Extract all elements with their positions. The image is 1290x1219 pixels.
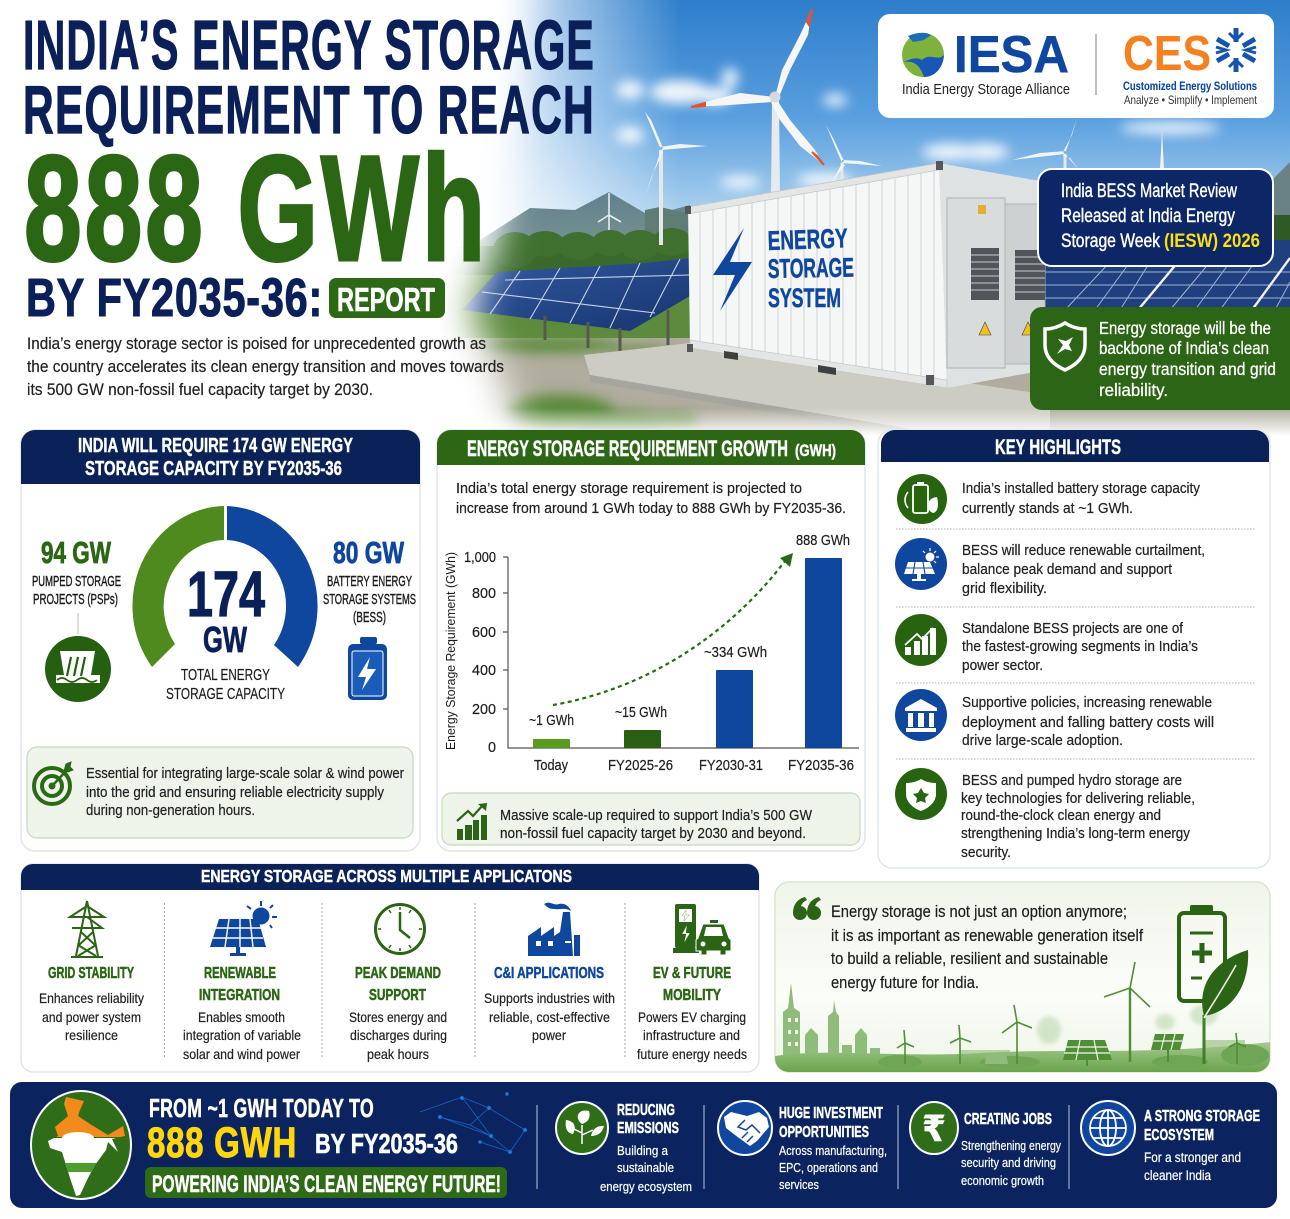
- bar value labels: ~1 GWh: [529, 713, 574, 729]
- bar value labels: ~15 GWh: [615, 705, 667, 721]
- bar chart: [443, 533, 859, 774]
- column: C&I applications: C&I APPLICATIONS: [494, 965, 604, 982]
- panel heading: INDIA WILL REQUIRE 174 GW ENERGY: [78, 435, 353, 457]
- benefit: ecosystem: For a stronger and: [1144, 1150, 1241, 1165]
- column: peak demand support: [349, 904, 447, 1062]
- container label: SYSTEM: [768, 283, 841, 313]
- panel heading: STORAGE CAPACITY BY FY2035-36: [85, 458, 342, 480]
- column: grid stability: GRID STABILITY: [48, 965, 134, 982]
- right solar array: [1045, 240, 1290, 312]
- container label: ENERGY: [767, 223, 848, 256]
- title: INDIA’S ENERGY STORAGE: [23, 6, 595, 84]
- icon: solar panel: [895, 538, 947, 590]
- gauge: total value: TOTAL ENERGY: [181, 667, 270, 684]
- icon: globe: [902, 33, 944, 77]
- icon: clock: [376, 904, 424, 954]
- note: integration: during non-generation hours.: [86, 803, 255, 819]
- column: peak demand support: PEAK DEMAND: [355, 965, 441, 982]
- y-axis tick labels: [464, 550, 496, 756]
- bars: [533, 558, 842, 748]
- panel: storage requirement growth: [437, 430, 865, 851]
- gauge: pumped storage arc: [132, 506, 224, 667]
- icon: battery: [348, 637, 387, 700]
- logo card: Customized Energy Solutions: [1123, 79, 1257, 93]
- category labels: FY2025-26: [608, 758, 673, 774]
- white fade over photo: [380, 0, 530, 470]
- column: C&I applications: reliable, cost-effective: [489, 1009, 610, 1025]
- callout: market review: [1038, 169, 1273, 266]
- logo card: [878, 14, 1274, 118]
- benefit: jobs: security and driving: [961, 1156, 1056, 1170]
- icon: rupee: ₹: [922, 1109, 946, 1150]
- battery storage stat: [323, 535, 416, 700]
- intro paragraph: the country accelerates its clean energy transition and moves towards: [27, 357, 504, 376]
- panel: 174 GW capacity: [21, 430, 420, 851]
- highlight 5: security.: [961, 845, 1011, 861]
- callout: backbone: reliability.: [1099, 380, 1168, 400]
- column: grid stability: resilience: [65, 1027, 118, 1043]
- column: renewable integration: [183, 901, 301, 1062]
- gauge: total value: STORAGE CAPACITY: [166, 686, 285, 703]
- icon: transmission tower: [70, 901, 104, 957]
- benefit: investment: HUGE INVESTMENT: [779, 1105, 883, 1122]
- callout: market review: Storage Week: [1061, 231, 1160, 252]
- intro paragraph: [27, 334, 504, 399]
- gauge: total value: [166, 558, 285, 703]
- benefit: jobs: CREATING JOBS: [964, 1111, 1052, 1128]
- highlight 2: grid flexibility.: [962, 581, 1047, 597]
- banner headline: 888 GWH: [147, 1119, 297, 1167]
- callout: market review: (IESW) 2026: [1164, 231, 1260, 252]
- panel heading: [881, 430, 1269, 462]
- description: increase from around 1 GWh today to 888 GWh by FY2035-36.: [456, 501, 846, 517]
- note: scale-up: Massive scale-up required to support India’s 500 GW: [500, 808, 812, 824]
- highlight 5: BESS and pumped hydro storage are: [962, 773, 1182, 789]
- category labels: Today: [534, 758, 569, 774]
- gauge: total value: 174: [187, 558, 265, 630]
- column: peak demand support: discharges during: [350, 1027, 447, 1043]
- icon: growth bars: [457, 803, 487, 840]
- icon: EV charger and car: [673, 904, 731, 955]
- benefit: reducing emissions: REDUCING: [617, 1102, 675, 1119]
- icon: India map: [31, 1090, 131, 1200]
- title: [23, 6, 595, 148]
- panel heading: KEY HIGHLIGHTS: [995, 436, 1121, 459]
- container label: STORAGE: [768, 253, 854, 284]
- highlight 3: power sector.: [962, 658, 1043, 674]
- subtitle: by FY2035-36: BY FY2035-36:: [26, 268, 323, 328]
- panel heading: [21, 430, 420, 484]
- pumped storage stat: PUMPED STORAGE: [32, 574, 121, 590]
- note: integration: into the grid and ensuring reliable electricity supply: [86, 785, 385, 801]
- pumped storage stat: [32, 535, 121, 702]
- benefit: ecosystem: ECOSYSTEM: [1144, 1127, 1214, 1144]
- note: integration: Essential for integrating large-scale solar & wind power: [86, 766, 404, 782]
- logo card: India Energy Storage Alliance: [902, 81, 1070, 98]
- panel: applications: [21, 864, 759, 1072]
- note: integration: [27, 747, 413, 838]
- column: renewable integration: INTEGRATION: [199, 987, 280, 1004]
- report badge: REPORT: [337, 281, 435, 318]
- column: peak demand support: SUPPORT: [369, 987, 426, 1004]
- benefit: investment: OPPORTUNITIES: [779, 1124, 869, 1141]
- icon: growth chart: [895, 614, 947, 666]
- icon: globe: [1081, 1101, 1135, 1155]
- icon: government building: [895, 689, 947, 741]
- highlight 3: the fastest-growing segments in India’s: [962, 639, 1198, 655]
- icon: quotation mark: [793, 897, 821, 920]
- highlight 4: Supportive policies, increasing renewable: [962, 695, 1212, 711]
- y-axis tick labels: 200: [472, 702, 496, 718]
- panel heading: [437, 430, 865, 465]
- highlight 3: [895, 614, 1198, 674]
- bottom banner: [10, 1082, 1277, 1208]
- note: scale-up: [442, 793, 860, 845]
- quote text: energy future for India.: [831, 974, 979, 992]
- battery storage stat: STORAGE SYSTEMS: [323, 592, 416, 608]
- callout: market review: India BESS Market Review: [1061, 181, 1237, 202]
- battery storage stat: 80 GW: [333, 535, 405, 570]
- quote text: [831, 903, 1143, 992]
- category labels: [534, 758, 854, 774]
- panel heading: ENERGY STORAGE REQUIREMENT GROWTH: [467, 436, 788, 461]
- column: grid stability: and power system: [42, 1009, 141, 1025]
- bar value labels: 888 GWh: [796, 533, 850, 549]
- icon: rupee: [910, 1102, 958, 1154]
- panel heading: (GWH): [795, 441, 836, 460]
- column: EV and future mobility: EV & FUTURE: [653, 965, 731, 982]
- highlight 4: [895, 689, 1214, 749]
- highlight 1: [897, 474, 1201, 524]
- y-axis title: Energy Storage Requirement (GWh): [443, 552, 458, 750]
- banner headline: FROM ~1 GWH TODAY TO: [149, 1093, 374, 1123]
- arrow: growth trend: [553, 553, 793, 705]
- battery storage container: [685, 161, 1045, 388]
- icon: target: [34, 762, 73, 804]
- benefit: ecosystem: [1081, 1101, 1260, 1183]
- title: REQUIREMENT TO REACH: [23, 72, 595, 148]
- icon: battery with leaf: [1179, 905, 1248, 1018]
- column: C&I applications: [484, 903, 615, 1043]
- column: grid stability: [39, 901, 144, 1043]
- quote text: it is as important as renewable generation itself: [831, 927, 1143, 945]
- report badge: [329, 278, 445, 318]
- bar value labels: [529, 533, 850, 729]
- highlight 3: Standalone BESS projects are one of: [962, 621, 1184, 637]
- column: renewable integration: solar and wind power: [183, 1046, 300, 1062]
- column: peak demand support: peak hours: [367, 1046, 429, 1062]
- column: EV and future mobility: infrastructure and: [643, 1027, 740, 1043]
- column: renewable integration: integration of variable: [183, 1027, 301, 1043]
- gauge: total value: GW: [203, 619, 247, 660]
- logo card: IESA: [954, 26, 1069, 84]
- y-axis tick labels: 0: [488, 740, 496, 756]
- icon: battery leaf: [897, 474, 947, 524]
- icon: CES snowflake: [1216, 28, 1256, 72]
- pumped storage stat: PROJECTS (PSPs): [33, 592, 118, 608]
- benefit: reducing emissions: EMISSIONS: [617, 1120, 679, 1137]
- callout: market review: Released at India Energy: [1061, 206, 1235, 227]
- benefit: reducing emissions: energy ecosystem: [600, 1179, 692, 1194]
- banner headline: POWERING INDIA’S CLEAN ENERGY FUTURE!: [152, 1171, 501, 1198]
- y-axis tick labels: 400: [472, 663, 496, 679]
- column: EV and future mobility: future energy needs: [637, 1046, 747, 1062]
- description: [456, 481, 846, 517]
- hero photo: wind turbines, solar panels and battery container: [440, 0, 1290, 439]
- highlight 1: India’s installed battery storage capacity: [962, 481, 1201, 497]
- icon: handshake: [718, 1101, 772, 1155]
- column: peak demand support: Stores energy and: [349, 1009, 447, 1025]
- gauge: battery arc: [227, 506, 318, 667]
- icon: shield: [895, 768, 947, 820]
- banner headline: BY FY2035-36: [315, 1128, 458, 1159]
- column: renewable integration: RENEWABLE: [204, 965, 276, 982]
- benefit: jobs: [910, 1102, 1062, 1188]
- small turbine in the distance: [598, 193, 622, 230]
- intro paragraph: its 500 GW non-fossil fuel capacity target by 2030.: [27, 380, 373, 399]
- column: EV and future mobility: MOBILITY: [663, 987, 722, 1004]
- benefit: investment: services: [779, 1177, 819, 1192]
- battery storage stat: BATTERY ENERGY: [327, 574, 412, 590]
- bar value labels: ~334 GWh: [704, 645, 767, 661]
- column: C&I applications: Supports industries with: [484, 990, 615, 1006]
- benefit: reducing emissions: [556, 1102, 692, 1194]
- callout: backbone: [1030, 307, 1290, 410]
- benefit: ecosystem: cleaner India: [1144, 1168, 1211, 1183]
- highlight 1: currently stands at ~1 GWh.: [962, 501, 1133, 517]
- benefit: investment: Across manufacturing,: [779, 1143, 887, 1158]
- category labels: FY2030-31: [699, 758, 763, 774]
- icon: lightning bolt on container: [713, 228, 752, 311]
- icon: solar panel with sun: [210, 901, 277, 956]
- column: grid stability: Enhances reliability: [39, 990, 144, 1006]
- pumped storage stat: 94 GW: [41, 535, 112, 570]
- highlight 5: round-the-clock clean energy and: [961, 808, 1161, 824]
- illustration: green city skyline with turbines and solar: [775, 962, 1270, 1075]
- highlight 2: [895, 538, 1205, 597]
- column: EV and future mobility: [637, 904, 747, 1062]
- benefit: reducing emissions: sustainable: [617, 1160, 674, 1175]
- benefit: reducing emissions: Building a: [617, 1143, 669, 1158]
- column: EV and future mobility: Powers EV charging: [638, 1009, 746, 1025]
- concrete slab: [584, 343, 1050, 434]
- battery storage stat: (BESS): [353, 610, 386, 626]
- quote text: Energy storage is not just an option anymore;: [831, 903, 1127, 921]
- y-axis tick labels: 600: [472, 625, 496, 641]
- panel: key highlights: [878, 430, 1270, 868]
- wind turbines: [645, 9, 1164, 245]
- headline number: 888 GWh: 888 GWh: [24, 124, 488, 292]
- highlight 2: BESS will reduce renewable curtailment,: [962, 543, 1205, 559]
- benefit: jobs: economic growth: [961, 1174, 1044, 1188]
- icon: shield: [1045, 323, 1085, 370]
- left solar array: [462, 258, 690, 355]
- column: renewable integration: Enables smooth: [198, 1009, 285, 1025]
- panel heading: [21, 864, 759, 890]
- icon: leaves: [556, 1102, 608, 1154]
- highlight 5: strengthening India’s long-term energy: [961, 826, 1191, 842]
- highlight 4: deployment and falling battery costs will: [962, 715, 1214, 731]
- category labels: FY2035-36: [788, 758, 854, 774]
- benefit: jobs: Strengthening energy: [961, 1139, 1062, 1153]
- highlight 4: drive large-scale adoption.: [962, 733, 1123, 749]
- container label: [768, 228, 854, 308]
- intro paragraph: India’s energy storage sector is poised for unprecedented growth as: [27, 334, 486, 353]
- panel heading: ENERGY STORAGE ACROSS MULTIPLE APPLICATONS: [201, 866, 572, 886]
- benefit: investment: [718, 1101, 887, 1192]
- y-axis tick labels: 800: [472, 586, 496, 602]
- logo card: CES: [1123, 27, 1211, 81]
- quote text: to build a reliable, resilient and sustainable: [831, 950, 1108, 968]
- note: scale-up: non-fossil fuel capacity target by 2030 and beyond.: [500, 826, 806, 842]
- panel: quote: [775, 882, 1270, 1075]
- logo card: Analyze • Simplify • Implement: [1124, 93, 1258, 107]
- highlight 5: key technologies for delivering reliable,: [961, 791, 1195, 807]
- benefit: investment: EPC, operations and: [779, 1160, 878, 1175]
- column: C&I applications: power: [532, 1027, 566, 1043]
- axes: [503, 557, 859, 748]
- y-axis tick labels: 1,000: [464, 550, 496, 566]
- highlight 2: balance peak demand and support: [962, 562, 1172, 578]
- banner headline: [145, 1093, 507, 1198]
- decorative network: [420, 1092, 527, 1154]
- description: India’s total energy storage requirement is projected to: [456, 481, 802, 497]
- icon: factory: [528, 903, 580, 956]
- highlight 5: [895, 768, 1195, 861]
- icon: hydro dam: [45, 636, 111, 702]
